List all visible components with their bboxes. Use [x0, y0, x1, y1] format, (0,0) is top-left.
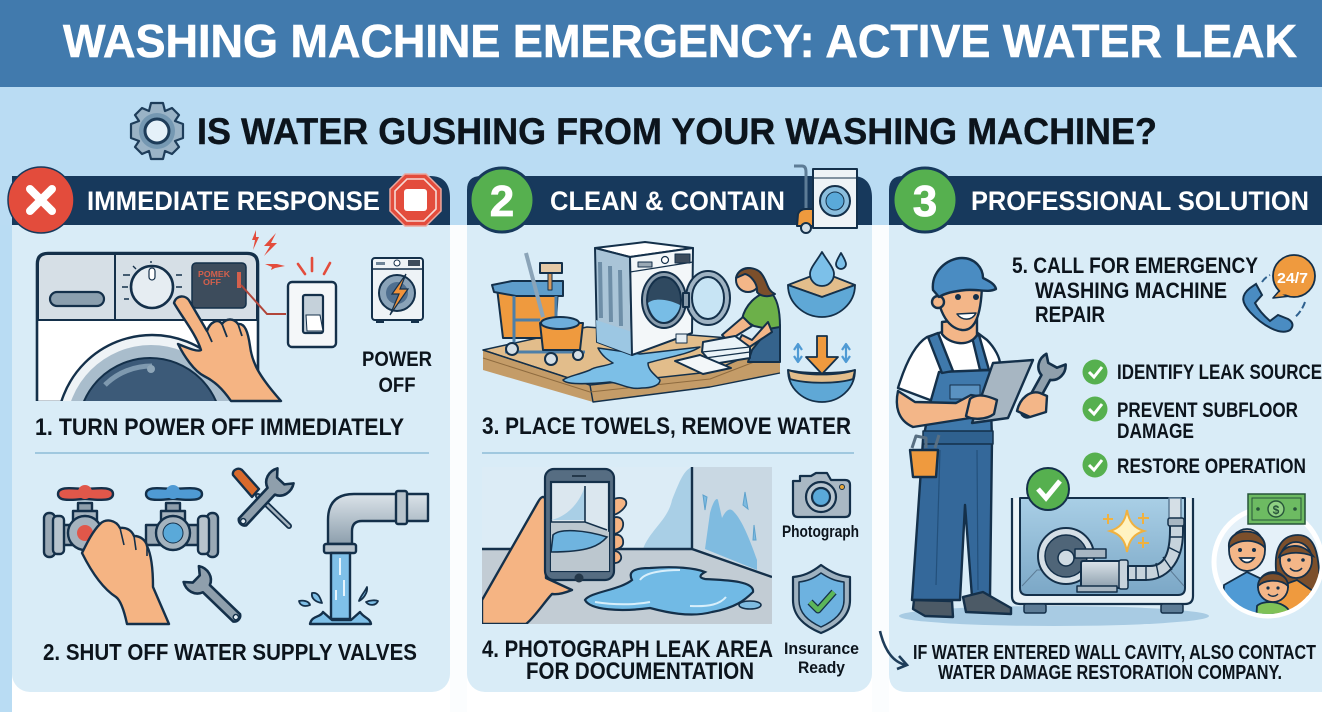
step 5 text: WASHING MACHINE: [1035, 278, 1227, 303]
legs: [912, 440, 992, 600]
shirt: [898, 331, 1000, 400]
icon: number 2: [470, 168, 534, 232]
header band: professional solution: [889, 176, 1322, 225]
icon: washer power off: [372, 258, 423, 323]
illustration: cleaning scene: [483, 242, 780, 402]
header band: clean and contain: CLEAN & CONTAIN: [550, 186, 785, 216]
icon: drop into wet floor: [788, 252, 855, 317]
forearm and hand: [897, 391, 997, 427]
step 4 text: FOR DOCUMENTATION: [526, 658, 754, 685]
illustration: washer control panel with hand: POMEK: [198, 270, 230, 279]
arrow to footnote: [880, 631, 907, 669]
step 4 text: 4. PHOTOGRAPH LEAK AREA: [482, 636, 773, 663]
icon: pipe with running water: [299, 491, 428, 624]
hand pressing button: [174, 296, 281, 401]
illustration: ground shadow: [899, 606, 1209, 626]
neck and head: [942, 318, 977, 343]
washer: [595, 242, 693, 257]
label: power off: [362, 348, 432, 397]
icon: crossed wrench and screwdriver: [231, 467, 295, 533]
title banner: [0, 0, 1322, 87]
label: insurance ready: Insurance: [784, 639, 859, 658]
icon: happy family: [1214, 508, 1322, 622]
sparks: [252, 230, 285, 270]
panel: clean and contain: [467, 166, 872, 692]
header band: clean and contain: [467, 176, 872, 225]
floor platform: [483, 327, 780, 402]
illustration: water valves with hand: [44, 485, 218, 624]
label: photograph: Photograph: [782, 522, 859, 541]
icon: stop sign: [390, 174, 441, 226]
hand on valve: [82, 521, 169, 624]
bib and straps: [923, 370, 992, 440]
label: power off: OFF: [378, 374, 416, 397]
title banner: WASHING MACHINE EMERGENCY: ACTIVE WATER LEAK: [63, 15, 1297, 67]
open door: [686, 271, 730, 325]
icon: number 3: 3: [913, 177, 937, 226]
step 5 text: [1012, 253, 1258, 327]
icon: wall switch: [288, 258, 336, 347]
icon: number 2: 2: [490, 177, 514, 226]
header band: immediate response: [12, 176, 450, 225]
icon: arrow into floor: [788, 336, 855, 402]
panel: immediate response: [8, 167, 450, 692]
subtitle with gear icon: [131, 103, 1157, 159]
step 1 text: 1. TURN POWER OFF IMMEDIATELY: [35, 414, 404, 441]
icon: small outline camera: [485, 468, 525, 501]
icon: number 3: [893, 168, 957, 232]
cart: [497, 288, 558, 338]
cap: [933, 258, 996, 297]
icon: cart with washer: [794, 166, 857, 233]
tool pouch: [912, 435, 939, 448]
step 5 text: REPAIR: [1035, 302, 1105, 327]
label: insurance ready: [784, 639, 859, 677]
illustration: washer control panel with hand: [36, 230, 286, 402]
label: power off: POWER: [362, 348, 432, 371]
tablet: [972, 360, 1033, 423]
icon: sparkle: [1103, 510, 1149, 552]
child: [1256, 601, 1290, 614]
icon: phone with 24/7: [1243, 255, 1315, 332]
icon: smartphone: [545, 469, 626, 582]
wrench in hand: [1012, 353, 1068, 423]
illustration: repaired washer pump: [1012, 498, 1193, 613]
icon: dollar bill: $: [1273, 503, 1280, 517]
spreading puddle: [563, 347, 700, 388]
step 4 text: [482, 636, 773, 685]
woman: [748, 325, 780, 362]
checklist: prevent subfloor damage: DAMAGE: [1117, 420, 1194, 443]
footnote text: [913, 642, 1316, 684]
icon: phone with 24/7: 24/7: [1277, 270, 1308, 287]
icon: green check badge: [1027, 468, 1069, 510]
father: [1222, 572, 1276, 614]
step 3 text: 3. PLACE TOWELS, REMOVE WATER: [482, 413, 851, 440]
subtitle with gear icon: IS WATER GUSHING FROM YOUR WASHING MACHINE?: [197, 111, 1157, 152]
icon: wrench: [182, 564, 248, 629]
step 5 text: 5. CALL FOR EMERGENCY: [1012, 253, 1258, 278]
icon: red X: [8, 167, 74, 233]
icon: dollar bill: [1248, 494, 1305, 524]
illustration: technician: [897, 258, 1068, 617]
illustration: washer control panel with hand: OFF: [203, 278, 221, 287]
header band: professional solution: PROFESSIONAL SOLUTION: [971, 186, 1309, 216]
checklist: prevent subfloor damage: [1082, 396, 1298, 443]
illustration: phone photographing the puddle: [482, 467, 772, 624]
towels: [702, 336, 750, 364]
header band: immediate response: IMMEDIATE RESPONSE: [87, 186, 380, 216]
label: insurance ready: Ready: [798, 658, 845, 677]
mother: [1276, 535, 1320, 595]
pointer line to switch: [241, 285, 286, 314]
icon: shield with check: [793, 565, 850, 633]
icon: camera: [793, 473, 850, 517]
step 2 text: 2. SHUT OFF WATER SUPPLY VALVES: [43, 639, 417, 665]
panel: professional solution: [880, 168, 1322, 692]
icon: gear: [131, 103, 183, 159]
